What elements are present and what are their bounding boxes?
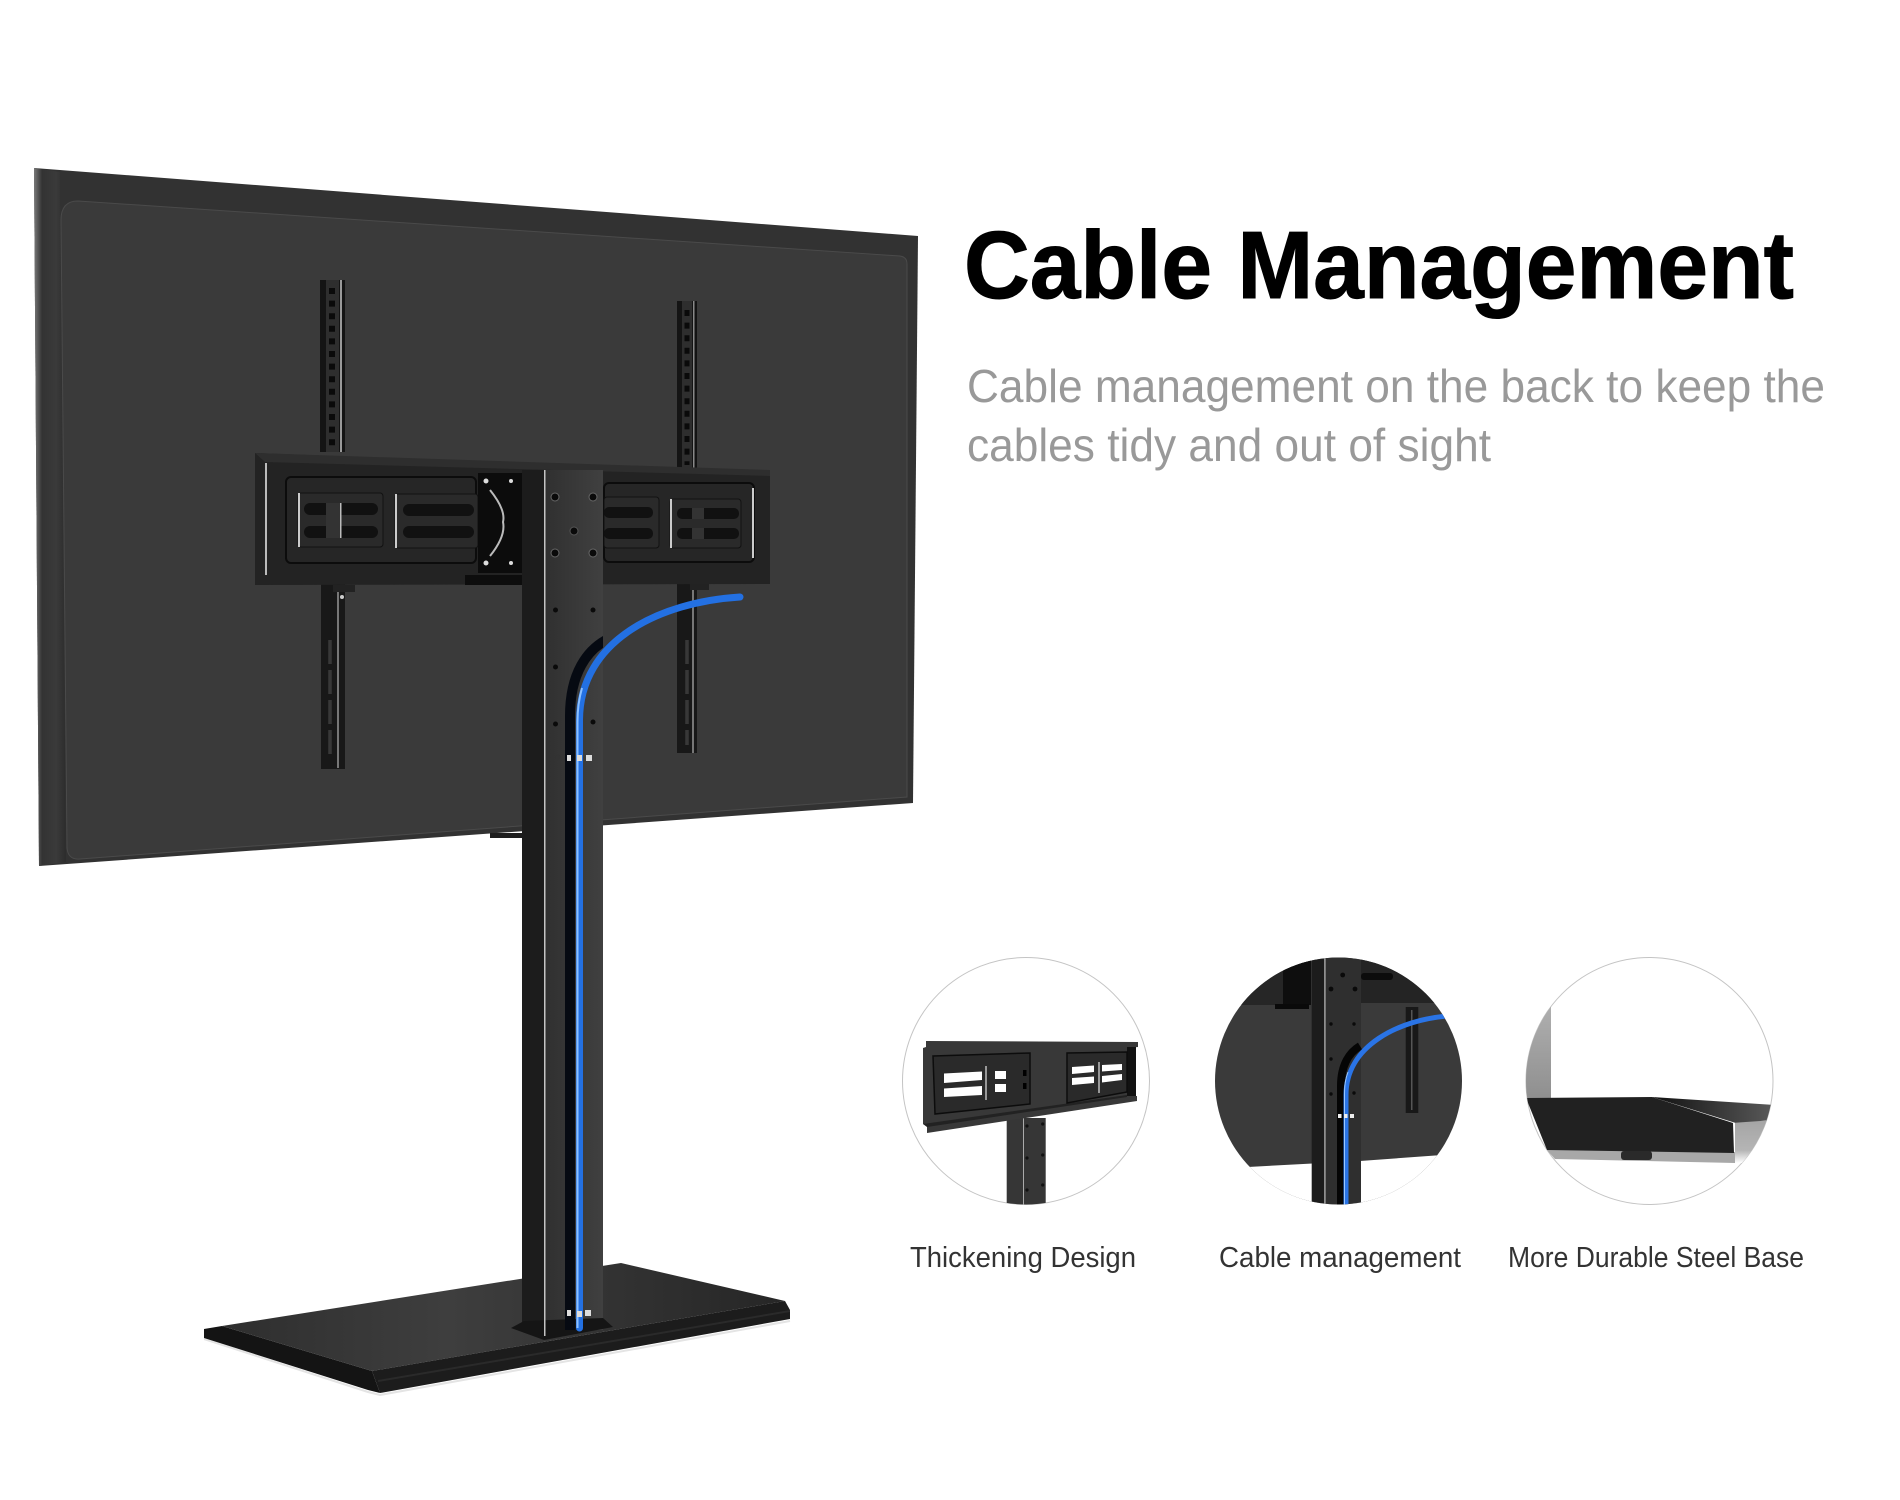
description: Cable management on the back to keep the bbox=[967, 360, 1825, 412]
pole holes bbox=[551, 493, 597, 726]
VESA rail left bbox=[320, 280, 355, 769]
caption: steel base: More Durable Steel Base bbox=[1508, 1242, 1804, 1274]
detail circle: cable management bbox=[1215, 958, 1462, 1204]
centre hinge bbox=[478, 473, 522, 573]
cable groove bbox=[570, 640, 606, 1330]
description: cables tidy and out of sight bbox=[967, 419, 1491, 471]
detail circle: thickening design bbox=[902, 958, 1150, 1213]
detail circle: steel base bbox=[1524, 958, 1775, 1204]
infographic canvas bbox=[34, 168, 1823, 1396]
cable clips bbox=[556, 754, 592, 1317]
mounting plate bbox=[255, 453, 770, 585]
VESA rail right bbox=[677, 301, 709, 753]
TV back bbox=[34, 168, 918, 866]
caption: cable management: Cable management bbox=[1219, 1242, 1461, 1274]
blue cable bbox=[578, 597, 740, 1328]
title: Cable Management bbox=[964, 212, 1794, 319]
description bbox=[967, 360, 1825, 471]
base bbox=[204, 1263, 790, 1395]
pole bbox=[511, 470, 613, 1340]
caption: thickening design: Thickening Design bbox=[910, 1242, 1136, 1274]
